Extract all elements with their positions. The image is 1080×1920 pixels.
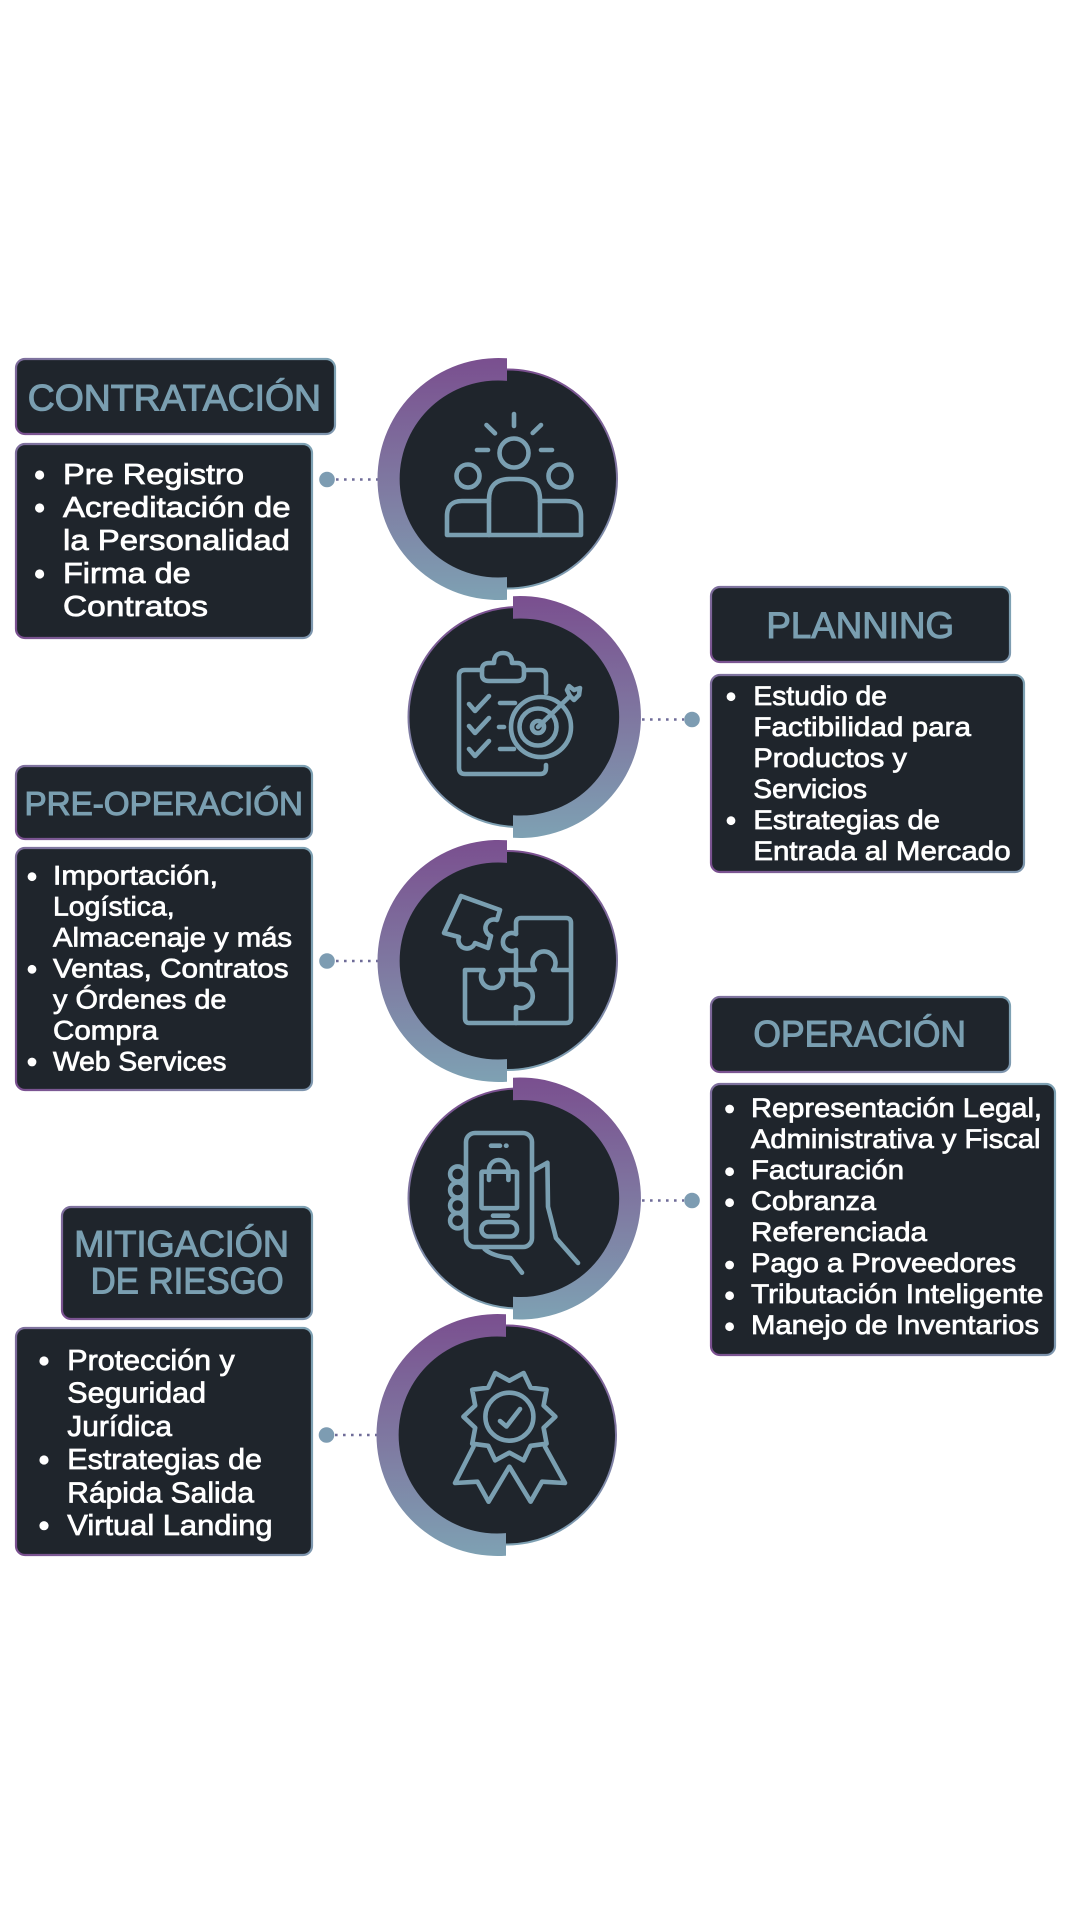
list: mitigación de riesgo: Protección y [67,1345,235,1377]
icon: people with idea [447,414,581,535]
icon: award badge [455,1373,565,1502]
list: pre-operación: Web Services [53,1046,227,1076]
list: operación: Facturación [751,1155,904,1185]
heading: planning: PLANNING [766,605,954,646]
list: planning: Estrategias de [753,805,940,835]
circle: planning [408,596,641,838]
list: pre-operación: Compra [53,1015,159,1045]
list: planning [711,675,1024,872]
list: operación: Manejo de Inventarios [751,1310,1039,1340]
panel: mitigación de riesgo [16,1207,616,1556]
icon: clipboard and target [459,653,580,774]
panel: pre-operación [16,766,617,1090]
heading: mitigación de riesgo: MITIGACIÓN [74,1224,289,1265]
panel: contratación [16,358,617,638]
icon: hand holding phone [450,1133,578,1273]
list: contratación: Acreditación de [63,492,291,524]
list: contratación [16,444,312,638]
list: planning: Factibilidad para [753,712,972,742]
connector: operación [642,1193,700,1208]
list: mitigación de riesgo: Virtual Landing [67,1510,273,1542]
list: pre-operación: Almacenaje y más [53,922,292,952]
list: pre-operación: y Órdenes de [53,983,226,1014]
list: planning: Servicios [753,774,867,804]
list: contratación: la Personalidad [63,525,290,557]
connector: mitigación de riesgo [319,1427,377,1443]
heading: planning [711,587,1010,662]
panel: planning [408,587,1024,872]
list: pre-operación [16,848,312,1090]
circle: pre-operación [377,840,617,1082]
icon: puzzle pieces [444,896,571,1023]
list: operación: Pago a Proveedores [751,1248,1016,1278]
list: contratación: Pre Registro [63,459,244,491]
list: mitigación de riesgo: Seguridad [67,1378,206,1410]
list: contratación: Contratos [63,591,208,623]
circle: mitigación de riesgo [376,1314,616,1556]
connector: planning [642,712,700,727]
list: operación: Cobranza [751,1186,877,1216]
list: planning: Entrada al Mercado [753,836,1011,866]
heading: mitigación de riesgo [62,1207,312,1319]
list: operación: Tributación Inteligente [751,1279,1044,1309]
heading: operación [711,997,1010,1072]
list: pre-operación: Ventas, Contratos [53,953,289,983]
heading: contratación: CONTRATACIÓN [28,378,321,419]
list: contratación: Firma de [63,558,191,590]
list: mitigación de riesgo: Jurídica [67,1411,173,1443]
list: planning: Estudio de [753,681,887,711]
list: mitigación de riesgo: Estrategias de [67,1444,262,1476]
heading: pre-operación [16,766,312,839]
heading: pre-operación: PRE-OPERACIÓN [24,785,303,823]
heading: mitigación de riesgo: DE RIESGO [91,1260,284,1301]
heading: operación: OPERACIÓN [753,1014,966,1055]
list: mitigación de riesgo [16,1328,312,1555]
connector: pre-operación [319,953,378,969]
list: planning: Productos y [753,743,908,773]
connector: contratación [319,472,378,487]
circle: operación [408,1078,641,1320]
circle: contratación [377,358,617,600]
list: pre-operación: Importación, [53,860,218,890]
panel: operación [408,997,1055,1355]
list: pre-operación: Logística, [53,891,175,921]
list: operación [711,1084,1055,1355]
list: operación: Representación Legal, [751,1093,1042,1123]
heading: contratación [16,359,335,434]
list: operación: Administrativa y Fiscal [751,1124,1040,1154]
list: operación: Referenciada [751,1217,928,1247]
list: mitigación de riesgo: Rápida Salida [67,1477,255,1509]
